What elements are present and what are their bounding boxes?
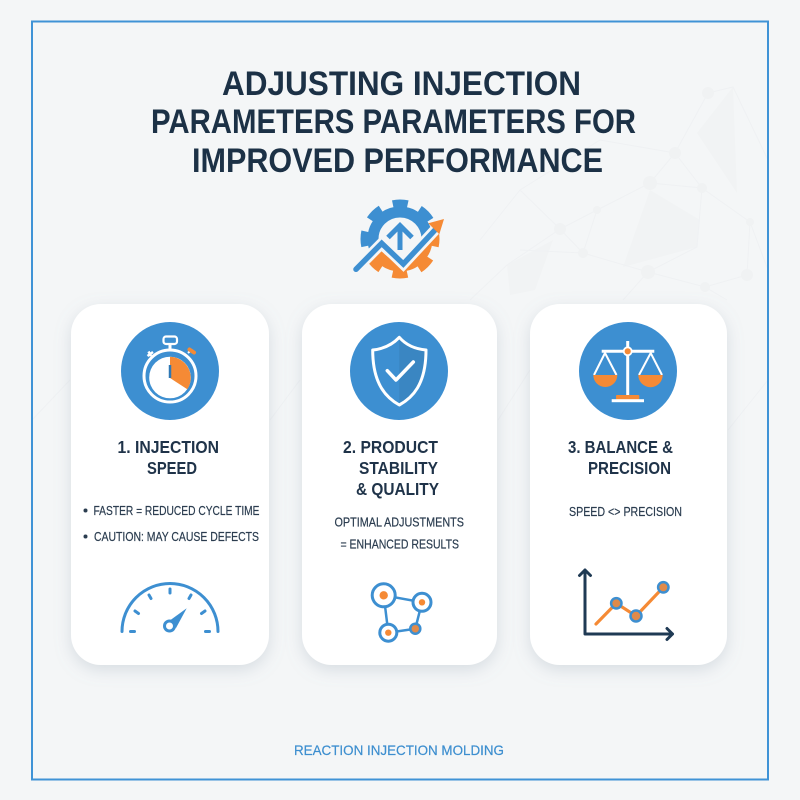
bullet list: CAUTION: MAY CAUSE DEFECTS bbox=[94, 530, 259, 544]
heading: & QUALITY bbox=[356, 479, 439, 499]
icon: line chart bbox=[580, 570, 672, 640]
heading bbox=[568, 437, 673, 478]
title: PARAMETERS PARAMETERS FOR bbox=[151, 103, 636, 141]
heading: 1. INJECTION bbox=[118, 437, 219, 457]
panel: product stability and quality bbox=[302, 304, 497, 665]
body text: OPTIMAL ADJUSTMENTS bbox=[334, 516, 464, 530]
panel: balance and precision bbox=[530, 304, 727, 665]
heading: PRECISION bbox=[588, 458, 671, 478]
icon: balance scales bbox=[579, 322, 677, 420]
title: ADJUSTING INJECTION bbox=[222, 65, 581, 103]
heading: SPEED bbox=[147, 458, 197, 478]
panel: injection speed bbox=[71, 304, 269, 665]
card background bbox=[302, 304, 497, 665]
icon: gauge bbox=[122, 584, 218, 632]
card background bbox=[71, 304, 269, 665]
body text: SPEED <> PRECISION bbox=[569, 505, 682, 519]
bullet list: FASTER = REDUCED CYCLE TIME bbox=[94, 504, 260, 518]
icon: gear with rising arrow bbox=[356, 204, 444, 274]
title bbox=[151, 65, 636, 180]
body text bbox=[334, 516, 464, 552]
heading: STABILITY bbox=[359, 458, 438, 478]
heading bbox=[118, 437, 219, 478]
title: IMPROVED PERFORMANCE bbox=[192, 142, 603, 180]
icon: network nodes bbox=[372, 584, 431, 641]
heading bbox=[343, 437, 439, 499]
footer label: REACTION INJECTION MOLDING bbox=[294, 742, 504, 758]
heading: 3. BALANCE & bbox=[568, 437, 673, 457]
icon: stopwatch bbox=[121, 322, 219, 420]
bullet list bbox=[84, 504, 260, 544]
icon: shield bbox=[350, 322, 448, 420]
card background bbox=[530, 304, 727, 665]
body text: = ENHANCED RESULTS bbox=[340, 538, 459, 552]
heading: 2. PRODUCT bbox=[343, 437, 438, 457]
